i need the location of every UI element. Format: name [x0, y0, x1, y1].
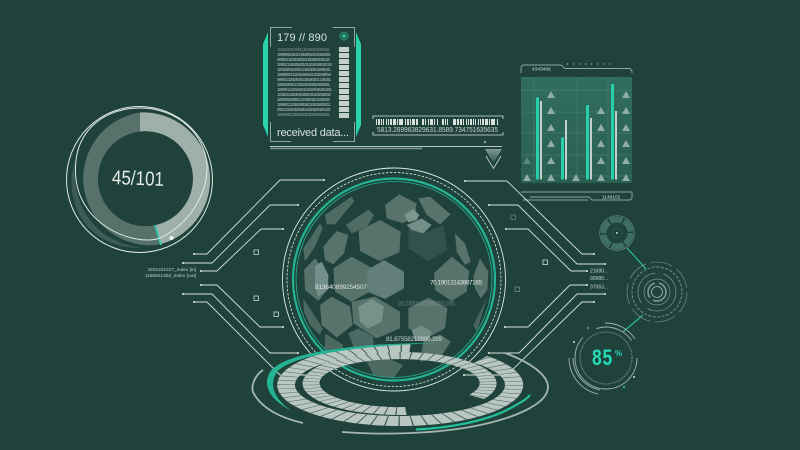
connector lines left	[182, 179, 325, 375]
donut value: 45/101	[112, 167, 164, 191]
chart triangles	[523, 91, 630, 181]
panel binary text block: 1000101110100101101010010101	[277, 113, 330, 118]
floor rings	[252, 343, 548, 434]
donut: inner sweeping arc	[75, 108, 207, 240]
panel binary text block: 1010111010010100101101010010	[277, 93, 331, 98]
panel binary text block: 0000111010010110100101110101	[277, 78, 331, 83]
panel binary text block: 1000011101010010110101001011	[277, 103, 331, 108]
barcode panel	[373, 116, 503, 135]
panel binary text block: 1000111010100101101010010110	[277, 63, 332, 68]
panel binary text block: 1000001010111010010110101001	[277, 53, 331, 58]
donut: light progress segment	[140, 112, 210, 244]
index labels: 1186821252_index [out]	[145, 273, 196, 279]
index labels: 4201241227_index [in]	[147, 267, 196, 273]
panel binary text block: 1000100101110100101010100101	[277, 83, 330, 88]
middle radar gauge	[627, 262, 687, 322]
panel binary text block: 1010100101001110100101000101	[277, 68, 331, 73]
chart light bars	[540, 101, 617, 180]
panel bracket frame	[270, 28, 354, 142]
index labels	[145, 267, 196, 279]
gauge percent sign: %	[615, 349, 622, 358]
chart header value: 4343486	[532, 66, 551, 72]
sphere readout: faint: 16.2300145285391285	[397, 300, 455, 308]
sphere readout: left: 813840899254507	[315, 284, 367, 291]
donut: indicator dot	[170, 236, 174, 240]
donut: outer circle	[66, 106, 212, 252]
panel binary text block: 1000011101001011010010101101	[277, 88, 332, 93]
chart grid	[521, 77, 632, 183]
segmented outer band	[277, 344, 523, 426]
arrow triangle	[485, 149, 502, 163]
chart panel	[521, 64, 632, 200]
teal connector upper	[627, 248, 646, 269]
teal arc lower right	[416, 395, 530, 430]
arrow outline	[486, 156, 501, 168]
chart footer value: 1149102	[602, 194, 621, 200]
sphere readout: right: 70.19013143987165	[430, 280, 482, 286]
divider lines	[270, 146, 502, 148]
right labels: 90988...	[590, 276, 608, 282]
chart header dots	[567, 63, 610, 65]
right labels: 21680...	[590, 268, 608, 274]
right labels	[590, 268, 608, 290]
panel binary text block: 1000000111010100101101010010	[277, 73, 331, 78]
barcode number: 5813.289963829631.8589.734751635635	[377, 127, 498, 134]
donut gauge: 45/101	[66, 106, 212, 252]
panel binary text block: 0001110101001011010100101101	[277, 108, 331, 113]
top gauge	[600, 216, 634, 250]
barcode brackets	[373, 116, 503, 135]
central sphere	[282, 168, 506, 391]
sphere readout: bottom: 81.87558212800.289	[386, 336, 442, 343]
panel binary text block: 0000111010100101101010010110	[277, 58, 330, 63]
right labels: 97063...	[590, 284, 608, 290]
panel teal side bars	[263, 32, 361, 137]
sphere hexagons	[303, 194, 488, 378]
small square markers	[254, 215, 548, 316]
chart teal bars	[536, 84, 614, 180]
gauge value: 85	[592, 345, 613, 370]
grey arc right	[342, 353, 548, 434]
panel status icon	[340, 32, 348, 40]
donut: teal marker	[155, 225, 161, 245]
barcode stripes	[376, 119, 498, 125]
teal arc upper left	[267, 343, 437, 411]
donut: dark remainder ring	[83, 112, 160, 245]
panel level bars	[339, 47, 349, 118]
donut: shadow offset	[71, 160, 145, 248]
small dot	[484, 141, 486, 143]
divider bar with arrow	[270, 141, 502, 168]
grey arc left	[252, 370, 303, 423]
panel binary text block: 1010100101001110100101000101	[277, 48, 330, 53]
data panel: received data	[263, 28, 361, 142]
bottom gauge 85 percent	[569, 323, 637, 394]
gauge cluster	[569, 216, 687, 394]
teal connector lower	[623, 315, 643, 332]
segmented inner band	[303, 352, 497, 415]
panel counter: 179 // 890	[277, 32, 327, 44]
panel binary text block: 1000001010011101001011010100	[277, 98, 330, 103]
connector lines right	[463, 180, 606, 376]
chart background	[521, 77, 632, 183]
panel caption: received data...	[277, 127, 349, 139]
sphere rings	[282, 168, 506, 391]
panel binary text block	[277, 48, 332, 118]
